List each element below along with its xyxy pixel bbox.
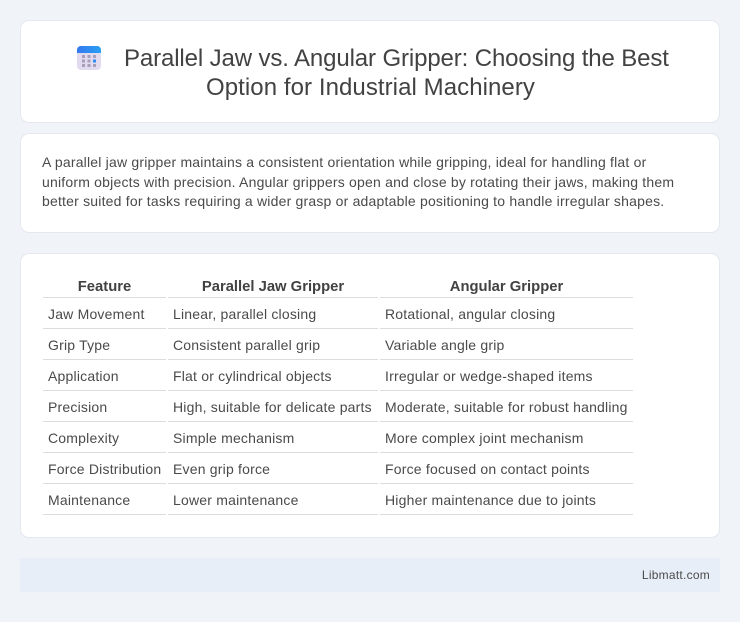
- row: Precision: Precision: [48, 399, 107, 415]
- row: Complexity: Simple mechanism: [173, 430, 294, 446]
- table header row: Parallel Jaw Gripper: [202, 279, 344, 295]
- panel: summary: [20, 133, 720, 233]
- row: Force Distribution: Even grip force: [173, 461, 270, 477]
- row: Precision: Moderate, suitable for robust handling: [385, 399, 628, 415]
- row: Jaw Movement: Jaw Movement: [48, 306, 145, 322]
- title: Parallel Jaw vs. Angular Gripper: Choosing the Best: [124, 45, 669, 72]
- table header row: Angular Gripper: [450, 279, 563, 295]
- summary text: [42, 154, 674, 209]
- row: Grip Type: Consistent parallel grip: [173, 337, 320, 353]
- row: Application: [43, 368, 633, 391]
- row: Maintenance: Lower maintenance: [173, 492, 299, 508]
- footer text: Libmatt.com: [642, 568, 710, 582]
- row: Jaw Movement: Linear, parallel closing: [173, 306, 316, 322]
- row: Grip Type: Variable angle grip: [385, 337, 505, 353]
- table header row: [43, 279, 633, 298]
- row: Grip Type: Grip Type: [48, 337, 110, 353]
- summary text: A parallel jaw gripper maintains a consistent orientation while gripping, ideal for handling flat or: [42, 154, 646, 170]
- row: Force Distribution: Force Distribution: [48, 461, 161, 477]
- row: Complexity: [43, 430, 633, 453]
- footer bar: [20, 558, 720, 592]
- table header row: Feature: [78, 279, 131, 295]
- row: Jaw Movement: [43, 306, 633, 329]
- summary text: better suited for tasks requiring a wider grasp or adaptable positioning to handle irregular shapes.: [42, 193, 664, 209]
- comparison table: [43, 279, 633, 515]
- row: Precision: [43, 399, 633, 422]
- row: Application: Application: [48, 368, 119, 384]
- row: Application: Irregular or wedge-shaped items: [385, 368, 593, 384]
- row: Jaw Movement: Rotational, angular closing: [385, 306, 555, 322]
- row: Application: Flat or cylindrical objects: [173, 368, 332, 384]
- row: Maintenance: Higher maintenance due to joints: [385, 492, 596, 508]
- panel: comparison table: [20, 253, 720, 538]
- icon: calendar: [77, 46, 101, 70]
- row: Complexity: Complexity: [48, 430, 119, 446]
- row: Force Distribution: [43, 461, 633, 484]
- row: Grip Type: [43, 337, 633, 360]
- row: Maintenance: Maintenance: [48, 492, 130, 508]
- row: Force Distribution: Force focused on contact points: [385, 461, 590, 477]
- row: Precision: High, suitable for delicate parts: [173, 399, 372, 415]
- title: [124, 45, 669, 101]
- title: Option for Industrial Machinery: [206, 74, 535, 101]
- panel: title card: [20, 20, 720, 123]
- summary text: uniform objects with precision. Angular grippers open and close by rotating their jaws, making them: [42, 174, 674, 190]
- row: Complexity: More complex joint mechanism: [385, 430, 584, 446]
- row: Maintenance: [43, 492, 633, 515]
